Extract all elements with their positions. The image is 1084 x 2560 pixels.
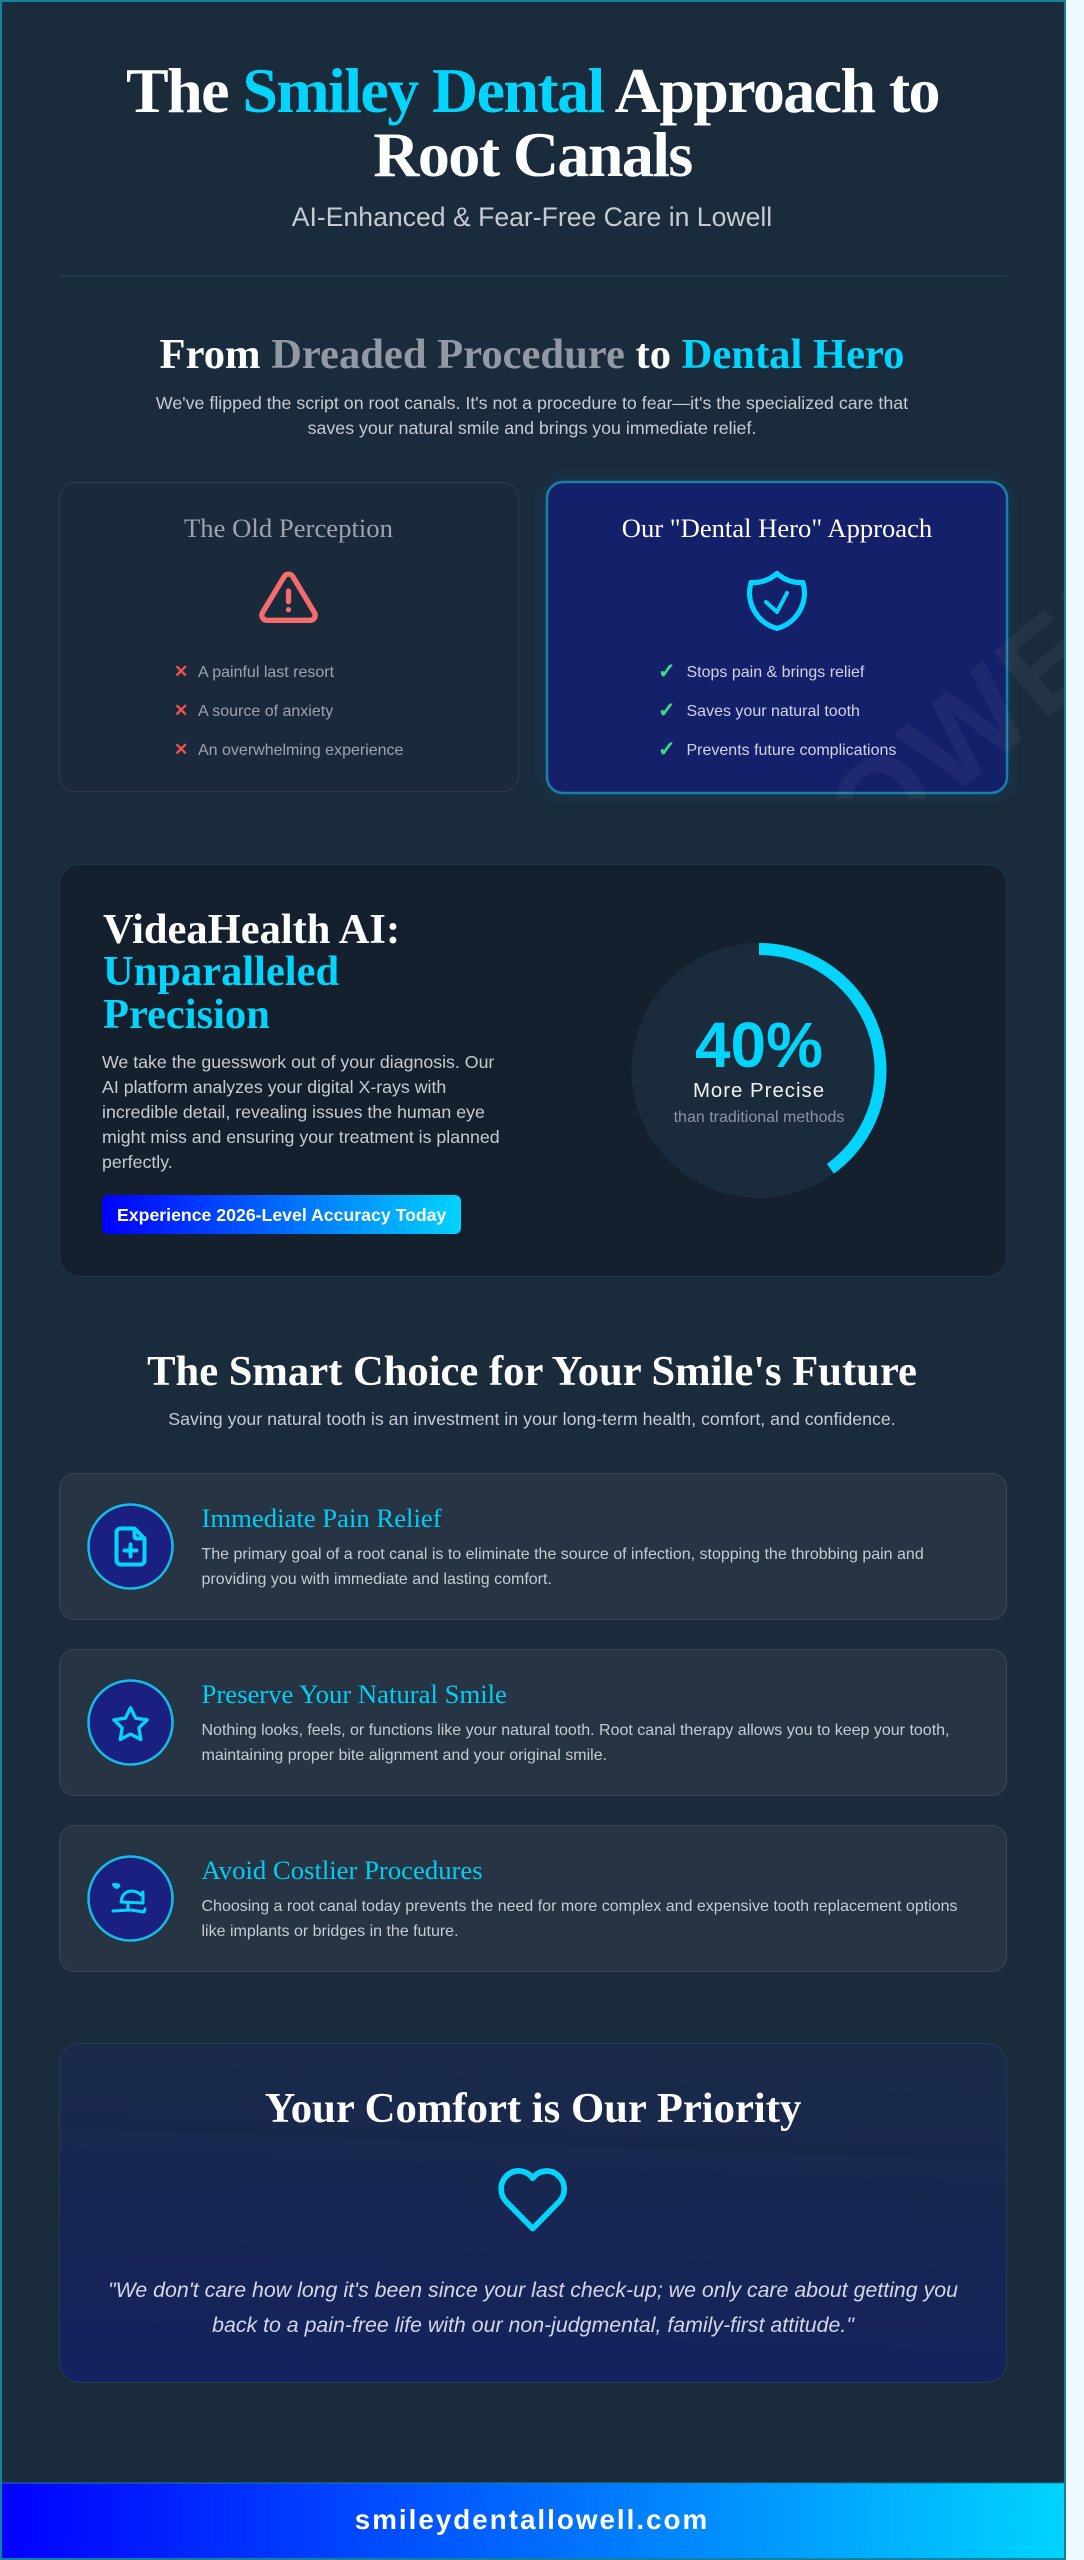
list: hero approach items: ✓ xyxy=(658,698,676,722)
subtitle: AI-Enhanced & Fear-Free Care in Lowell xyxy=(292,202,772,232)
header xyxy=(126,55,939,232)
panel: immediate pain relief xyxy=(60,1474,1006,1620)
chart: 40 percent ring xyxy=(632,943,886,1198)
section heading: the smart choice: The Smart Choice for Your Smile's Future xyxy=(147,1348,917,1395)
heading: Your Comfort is Our Priority xyxy=(265,2085,801,2132)
list: hero approach items xyxy=(658,659,896,761)
list: old perception items: ✕ xyxy=(174,662,188,682)
description: AI platform analyzes your digital X-rays with xyxy=(102,1077,446,1097)
description: perfectly. xyxy=(102,1152,173,1172)
panel: VideaHealth AI xyxy=(60,864,1006,1276)
icon: star xyxy=(88,1680,172,1764)
description: incredible detail, revealing issues the human eye xyxy=(102,1102,485,1122)
button xyxy=(102,1195,461,1234)
section heading: from dreaded procedure xyxy=(156,331,908,438)
heading: Unparalleled xyxy=(103,948,339,995)
benefit text: Nothing looks, feels, or functions like your natural tooth. Root canal therapy allows you to keep your tooth, xyxy=(202,1722,949,1739)
list: old perception items: A source of anxiety xyxy=(198,703,333,720)
description: We take the guesswork out of your diagnosis. Our xyxy=(102,1052,494,1072)
benefit text: The primary goal of a root canal is to eliminate the source of infection, stopping the throbbing pain and xyxy=(202,1546,924,1563)
chart: 40 percent ring: 40% xyxy=(695,1009,823,1081)
benefit text: Immediate Pain Relief xyxy=(202,1503,442,1533)
heading: VideaHealth AI: xyxy=(103,906,400,953)
section heading: from dreaded procedure: From Dreaded Procedure to Dental Hero xyxy=(160,331,904,378)
description xyxy=(102,1052,500,1172)
panel: preserve your natural smile xyxy=(60,1650,1006,1796)
heading xyxy=(103,906,400,1038)
icon: file plus xyxy=(88,1504,172,1588)
section heading: the smart choice xyxy=(147,1348,917,1429)
benefit text: like implants or bridges in the future. xyxy=(202,1923,459,1940)
list: hero approach items: Stops pain & brings relief xyxy=(686,664,865,681)
panel: dental hero approach xyxy=(546,482,1007,793)
footer xyxy=(2,2482,1064,2558)
benefit text: Preserve Your Natural Smile xyxy=(202,1679,507,1709)
list: hero approach items: ✓ xyxy=(658,737,676,761)
benefit text: maintaining proper bite alignment and your original smile. xyxy=(202,1747,607,1764)
icon: shield check xyxy=(750,573,804,628)
list: hero approach items: Saves your natural tooth xyxy=(686,703,860,720)
button: Experience 2026-Level Accuracy Today xyxy=(117,1205,447,1225)
heading: Precision xyxy=(103,991,270,1038)
panel: the old perception xyxy=(60,482,518,792)
list: old perception items: An overwhelming experience xyxy=(198,742,404,759)
benefit text: Choosing a root canal today prevents the need for more complex and expensive tooth replacement options xyxy=(202,1898,958,1915)
list: hero approach items: ✓ xyxy=(658,659,676,683)
panel: comfort priority xyxy=(60,2044,1006,2382)
header: Root Canals xyxy=(373,119,692,190)
section intro: Saving your natural tooth is an investment in your long-term health, comfort, and confidence. xyxy=(168,1409,896,1429)
quote xyxy=(108,2278,958,2337)
title: The Smiley Dental Approach to xyxy=(126,55,939,126)
list: hero approach items: Prevents future complications xyxy=(686,742,896,759)
intro text xyxy=(156,393,908,438)
list: old perception items xyxy=(174,662,404,760)
quote: back to a pain-free life with our non-judgmental, family-first attitude." xyxy=(212,2313,855,2337)
icon: heart xyxy=(501,2171,564,2229)
intro text: We've flipped the script on root canals. It's not a procedure to fear—it's the specialized care that xyxy=(156,393,908,413)
benefit text: Avoid Costlier Procedures xyxy=(202,1855,483,1885)
list: old perception items: ✕ xyxy=(174,701,188,721)
list: old perception items: ✕ xyxy=(174,740,188,760)
benefit text xyxy=(202,1503,924,1588)
chart: 40 percent ring: than traditional methods xyxy=(674,1109,844,1126)
list: old perception items: A painful last resort xyxy=(198,664,335,681)
benefit text xyxy=(202,1679,949,1764)
heading: The Old Perception xyxy=(184,513,393,543)
icon: dental chair xyxy=(88,1856,172,1940)
benefit text xyxy=(202,1855,958,1940)
intro text: saves your natural smile and brings you immediate relief. xyxy=(308,418,756,438)
icon: warning triangle xyxy=(262,574,315,620)
benefit text: providing you with immediate and lasting comfort. xyxy=(202,1571,552,1588)
quote: "We don't care how long it's been since your last check-up; we only care about getting you xyxy=(108,2278,958,2302)
panel: avoid costlier procedures xyxy=(60,1826,1006,1972)
description: might miss and ensuring your treatment is planned xyxy=(102,1127,500,1147)
chart: 40 percent ring: More Precise xyxy=(693,1080,825,1102)
heading: Our "Dental Hero" Approach xyxy=(622,513,932,543)
website: smileydentallowell.com xyxy=(355,2504,709,2535)
